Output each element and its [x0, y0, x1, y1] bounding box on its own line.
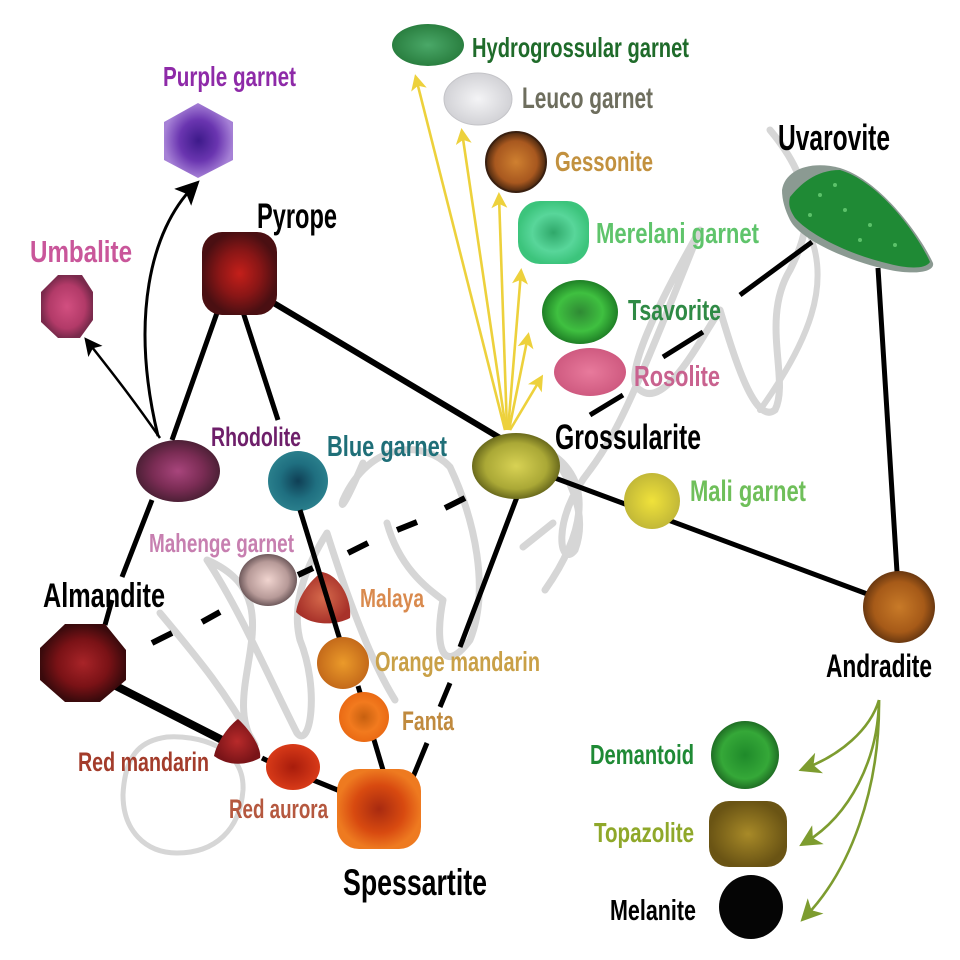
gem: purple garnet [164, 103, 233, 178]
label: tsavorite: Tsavorite [628, 295, 721, 327]
gem: orange mandarin [317, 637, 369, 689]
gem: uvarovite [782, 165, 933, 272]
label: malaya: Malaya [360, 583, 424, 613]
gem: demantoid [711, 721, 779, 789]
gem: almandite [40, 624, 126, 702]
arrows: pyrope group [88, 186, 194, 438]
blue garnet connector [300, 510, 340, 640]
gem: spessartite [337, 769, 421, 849]
label: rhodolite: Rhodolite [211, 422, 301, 452]
label: umbalite: Umbalite [30, 234, 132, 269]
gem: hydrogrossular garnet [392, 24, 464, 66]
watermark signature [123, 130, 818, 853]
arrows: grossularite varieties [416, 78, 541, 430]
gem: rhodolite [136, 440, 220, 502]
label: fanta: Fanta [402, 706, 455, 736]
gem: mali garnet [624, 473, 680, 529]
label: orange mandarin: Orange mandarin [375, 646, 540, 677]
label: almandite: Almandite [43, 577, 165, 615]
gem: topazolite [709, 801, 787, 867]
gem: red mandarin [214, 719, 260, 764]
gem: malaya [296, 572, 350, 623]
label: demantoid: Demantoid [590, 739, 694, 770]
gem: tsavorite [542, 280, 618, 344]
label: purple garnet: Purple garnet [163, 61, 296, 92]
label: mali garnet: Mali garnet [690, 475, 806, 508]
gem: umbalite [41, 275, 93, 338]
gem: red aurora [266, 744, 320, 790]
arrows: andradite varieties [806, 700, 879, 916]
label: red aurora: Red aurora [229, 794, 329, 824]
gem: fanta [339, 692, 389, 742]
gem: blue garnet [268, 451, 328, 511]
gem: pyrope [202, 232, 277, 315]
label: merelani garnet: Merelani garnet [596, 218, 759, 250]
label: gessonite: Gessonite [555, 146, 653, 177]
gem: leuco garnet [444, 73, 512, 125]
gem: mahenge garnet [239, 554, 297, 606]
gem: grossularite [472, 433, 560, 499]
label: red mandarin: Red mandarin [78, 747, 209, 777]
gem: andradite [863, 571, 935, 643]
label: blue garnet: Blue garnet [327, 431, 447, 463]
label: pyrope: Pyrope [257, 197, 337, 236]
label: rosolite: Rosolite [634, 361, 720, 393]
gem: melanite [719, 875, 783, 939]
gem: merelani garnet [518, 201, 589, 264]
network lines [105, 242, 897, 791]
label: hydrogrossular garnet: Hydrogrossular garnet [472, 32, 689, 63]
label: topazolite: Topazolite [594, 817, 694, 848]
label: leuco garnet: Leuco garnet [522, 82, 653, 115]
label: uvarovite: Uvarovite [778, 117, 890, 158]
label: melanite: Melanite [610, 895, 696, 927]
label: spessartite: Spessartite [343, 862, 487, 903]
gem: rosolite [554, 348, 626, 396]
label: grossularite: Grossularite [555, 418, 701, 457]
label: mahenge garnet: Mahenge garnet [149, 528, 294, 558]
gem: gessonite [486, 132, 546, 192]
